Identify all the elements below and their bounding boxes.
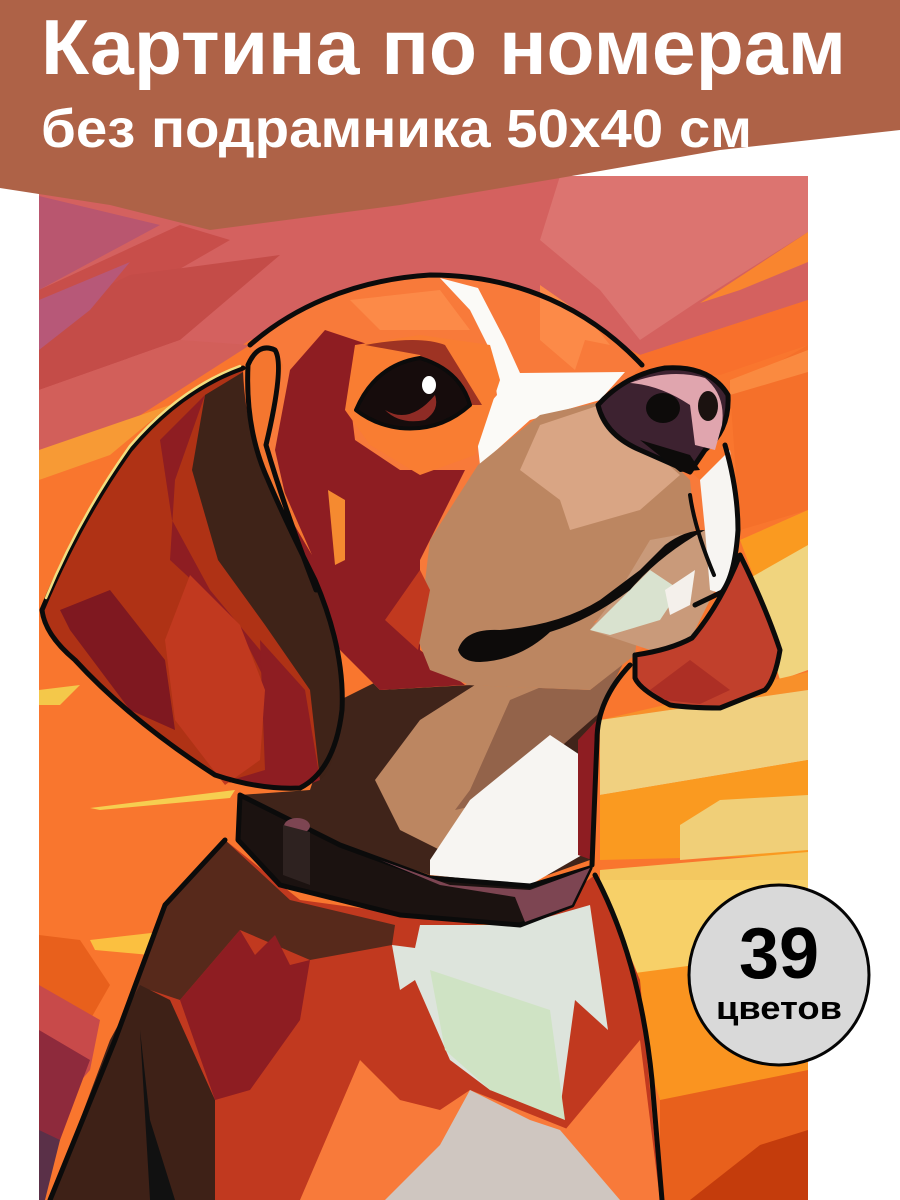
dog: collar (238, 795, 590, 925)
header banner (0, 0, 900, 230)
badge: colour count (689, 885, 869, 1065)
dog: head outline (250, 275, 642, 365)
dog: right ear (635, 555, 780, 708)
dog: left ear (42, 348, 342, 788)
dog: mouth (458, 530, 705, 662)
painting: beagle dog (42, 275, 780, 1200)
dog: head (250, 275, 738, 690)
dog: nose (598, 368, 728, 472)
subtitle: без подрамника 50х40 см (41, 99, 752, 159)
dog: body (50, 840, 662, 1200)
badge number: 39 (739, 914, 819, 994)
dog: eye (356, 358, 470, 429)
title: Картина по номерам (41, 3, 846, 91)
badge label: цветов (716, 990, 842, 1026)
painting: background sunset (39, 176, 808, 1200)
dog: neck and chest (240, 630, 640, 885)
